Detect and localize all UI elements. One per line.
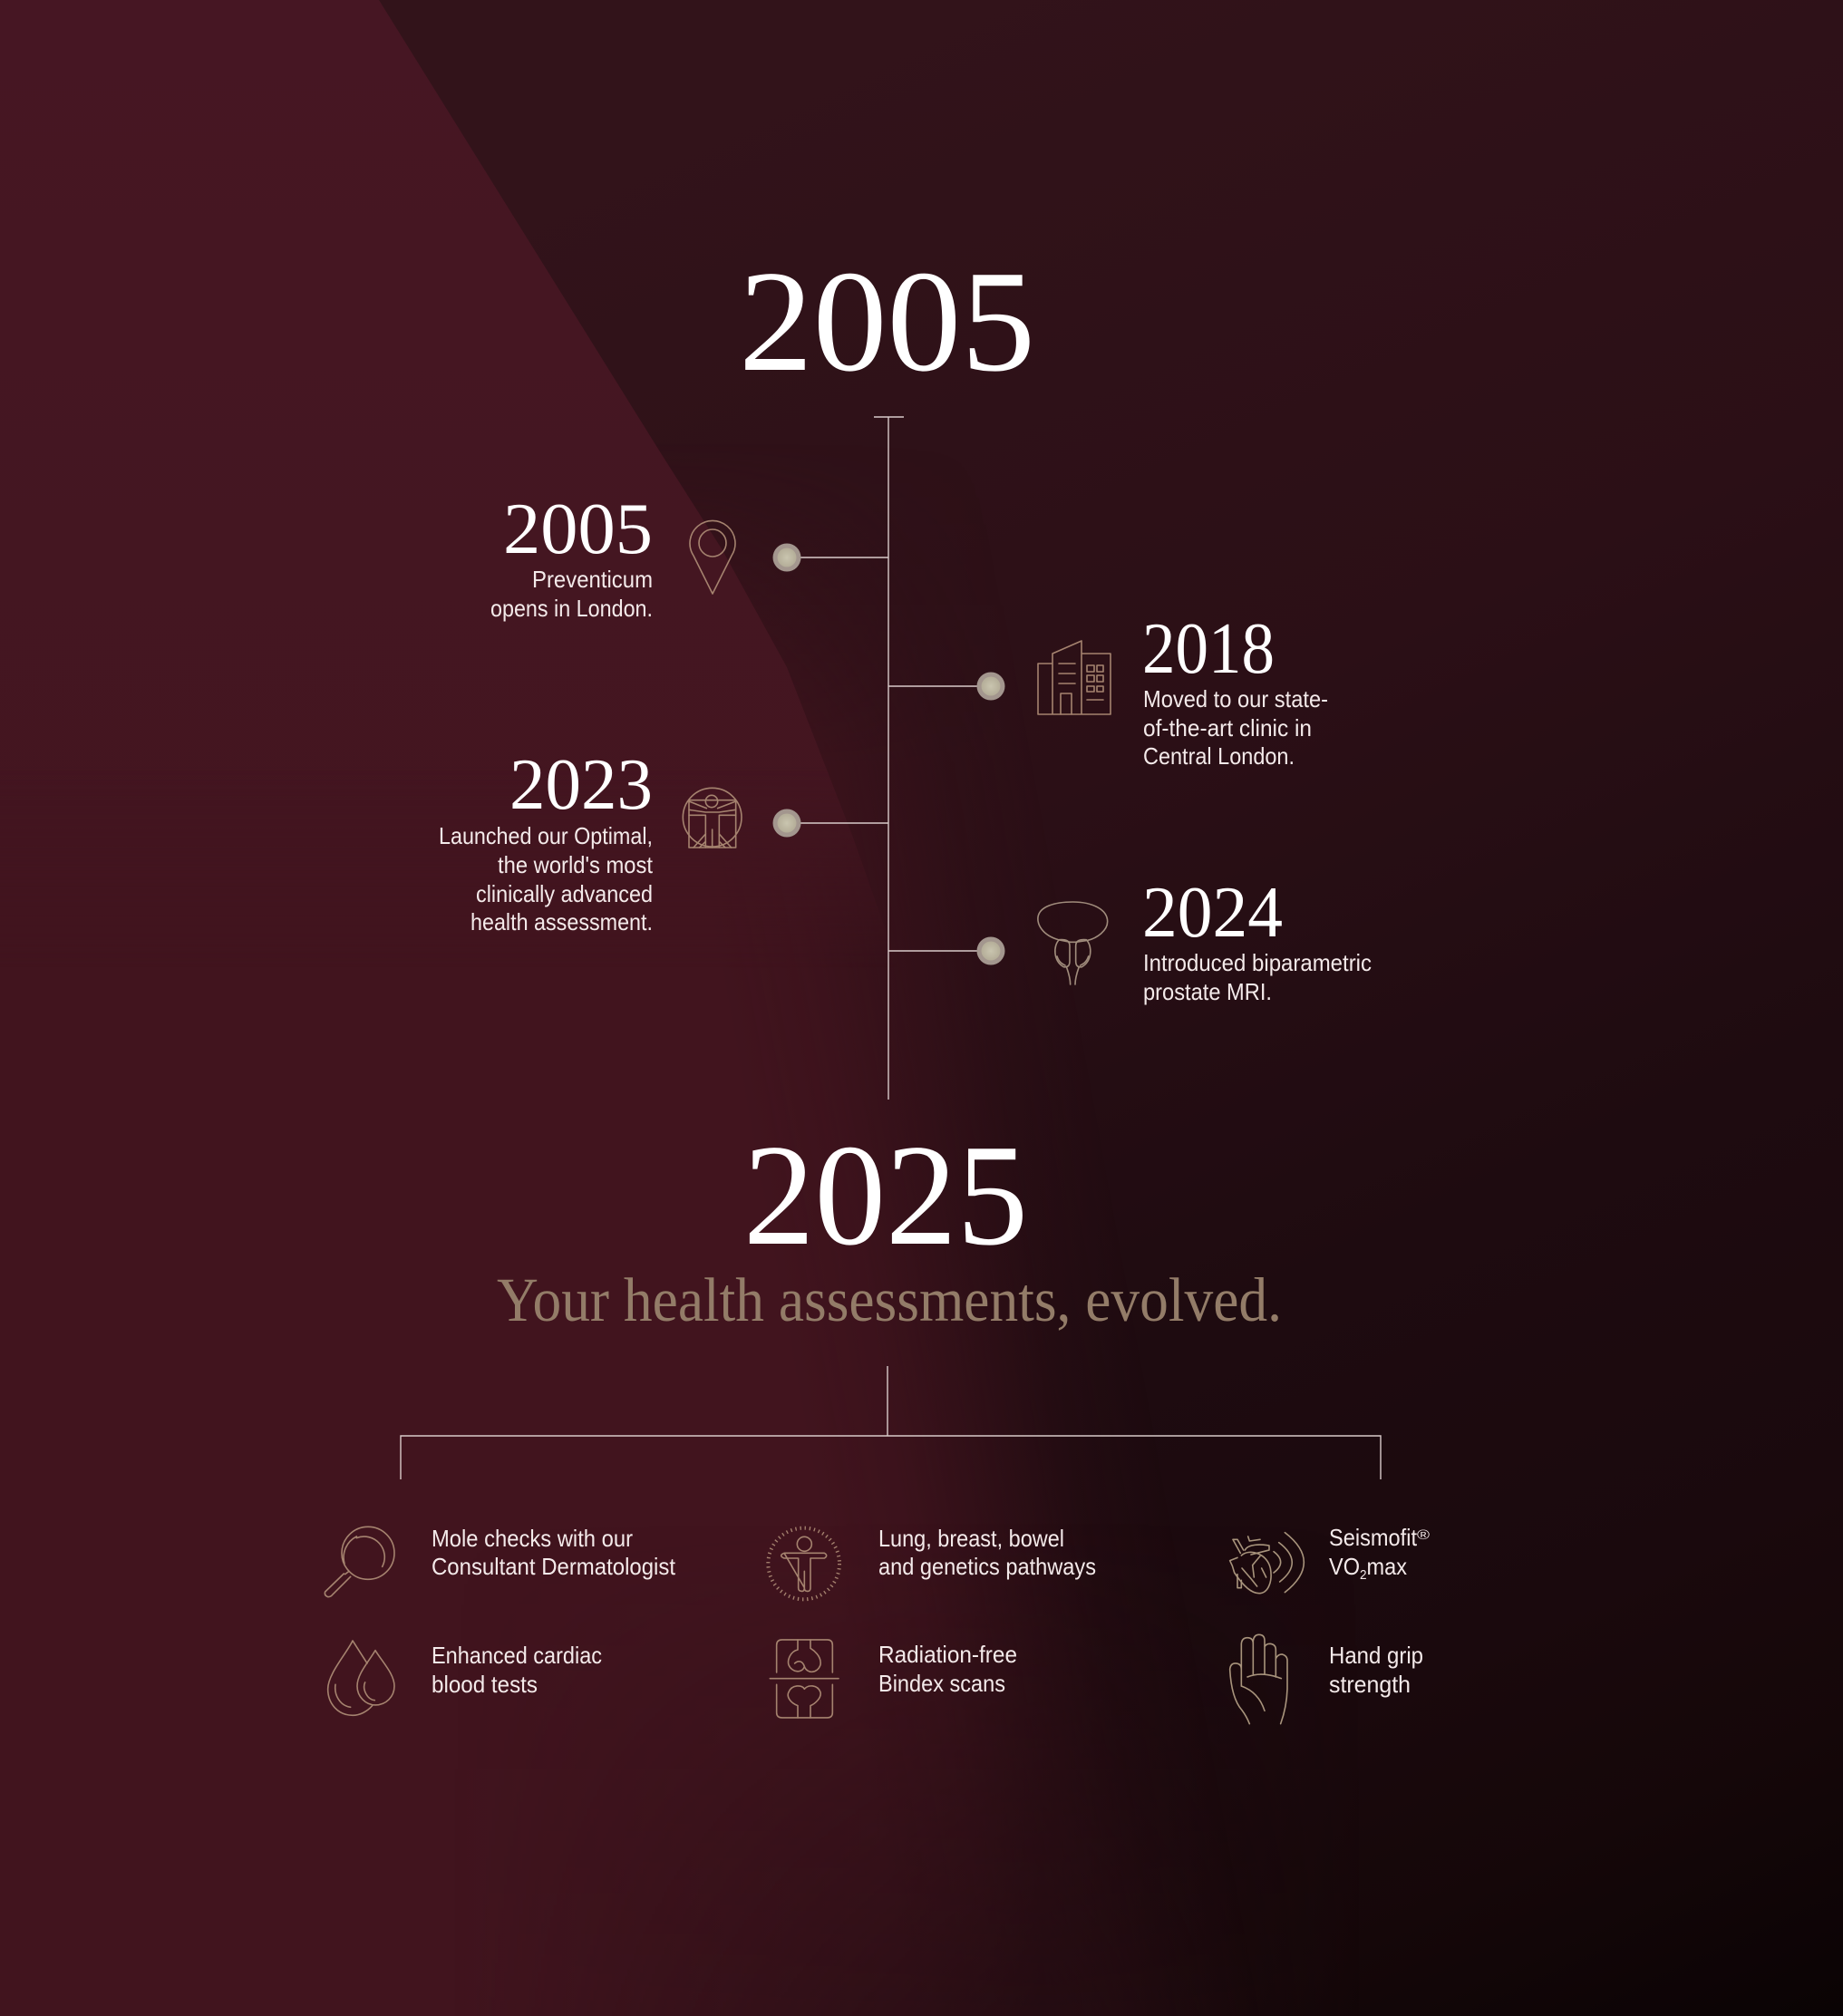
text: launched optimal: Launched our Optimal, <box>439 822 653 849</box>
feature: blood tests <box>328 1641 602 1715</box>
timeline entry: 2024 <box>888 873 1372 1005</box>
text: max <box>1367 1553 1407 1580</box>
timeline entry: 2018 <box>888 609 1328 770</box>
icon: hand <box>1230 1634 1287 1724</box>
text <box>432 1525 676 1580</box>
text: moved to clinic: of-the-art clinic in <box>1143 714 1312 741</box>
connector dot <box>772 544 888 571</box>
icon: prostate <box>1038 902 1108 984</box>
text: Enhanced cardiac <box>432 1642 602 1669</box>
text <box>1329 1642 1423 1698</box>
year 2005: 2005 <box>503 488 653 569</box>
feature: pathways <box>768 1525 1096 1599</box>
year 2023: 2023 <box>509 743 653 825</box>
text: Bindex scans <box>878 1670 1005 1697</box>
icon: body in dotted circle <box>768 1528 839 1599</box>
text: Consultant Dermatologist <box>432 1553 676 1580</box>
branch connector <box>401 1366 1381 1479</box>
text: launched optimal <box>439 822 654 935</box>
text: Preventicum opens in London <box>490 566 653 622</box>
icon: magnifier <box>325 1527 394 1597</box>
text: strength <box>1329 1671 1411 1698</box>
feature: mole checks <box>325 1525 676 1597</box>
feature: hand grip <box>1230 1634 1423 1724</box>
text: launched optimal: the world's most <box>498 851 654 878</box>
text: prostate MRI: Introduced biparametric <box>1143 949 1372 976</box>
connector dot <box>772 809 888 838</box>
year 2024: 2024 <box>1142 873 1283 953</box>
icon: heart with waves <box>1230 1533 1304 1594</box>
heading: 2025: 2025 <box>743 1114 1028 1275</box>
text <box>1329 1524 1430 1583</box>
timeline entry: 2005 <box>490 488 888 622</box>
connector dot <box>888 937 1004 964</box>
timeline spine <box>874 417 904 1100</box>
icon: location pin <box>690 520 735 594</box>
timeline entry: 2023 <box>439 743 888 935</box>
feature: bindex scans <box>770 1640 1017 1718</box>
text: Preventicum opens in London: Preventicum <box>532 566 653 593</box>
text <box>878 1525 1096 1580</box>
icon: bone scan <box>770 1640 839 1718</box>
text: Seismofit <box>1329 1524 1418 1551</box>
text: Hand grip <box>1329 1642 1423 1669</box>
text: Radiation-free <box>878 1641 1017 1668</box>
text: moved to clinic: Central London. <box>1143 742 1295 770</box>
feature: seismofit <box>1230 1524 1430 1594</box>
subheading: Your health assessments, evolved. <box>497 1265 1282 1334</box>
icon: vitruvian figure <box>683 788 742 848</box>
text: moved to clinic: Moved to our state- <box>1143 685 1328 712</box>
text: prostate MRI: prostate MRI. <box>1143 978 1272 1005</box>
icon: building <box>1038 641 1111 714</box>
title: 2005: 2005 <box>739 240 1035 402</box>
text: ® <box>1417 1527 1430 1543</box>
text: prostate MRI <box>1143 949 1372 1005</box>
text: launched optimal: health assessment. <box>470 908 653 935</box>
text: VO <box>1329 1553 1363 1580</box>
text <box>432 1642 602 1698</box>
icon: blood drops <box>328 1641 394 1715</box>
text: Preventicum opens in London: opens in London. <box>490 595 653 622</box>
text: moved to clinic <box>1143 685 1328 770</box>
text: Lung, breast, bowel <box>878 1525 1064 1552</box>
text: blood tests <box>432 1671 538 1698</box>
text <box>878 1641 1017 1697</box>
text: Mole checks with our <box>432 1525 633 1552</box>
text: 2 <box>1360 1567 1367 1583</box>
text: and genetics pathways <box>878 1553 1096 1580</box>
text: launched optimal: clinically advanced <box>476 880 653 907</box>
connector dot <box>888 673 1004 700</box>
year 2018: 2018 <box>1142 609 1275 689</box>
